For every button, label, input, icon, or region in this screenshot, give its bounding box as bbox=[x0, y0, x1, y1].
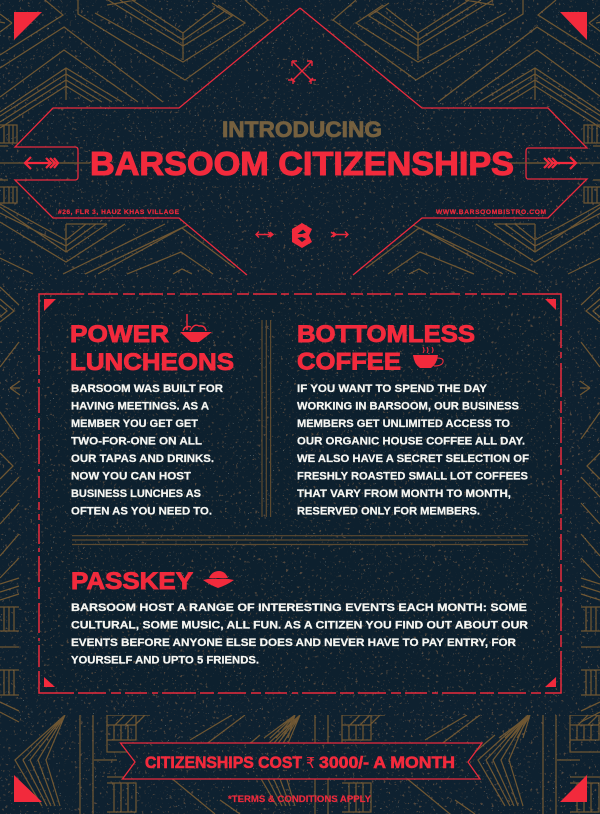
heading: passkey: PASSKEY bbox=[71, 568, 193, 595]
title: BARSOOM CITIZENSHIPS bbox=[90, 146, 514, 183]
heading: power luncheons bbox=[70, 321, 234, 376]
price banner: CITIZENSHIPS COST bbox=[145, 754, 302, 772]
text: passkey: CULTURAL, SOME MUSIC, ALL FUN. AS A CITIZEN YOU FIND OUT ABOUT OUR bbox=[71, 620, 528, 632]
text: bottomless coffee: IF YOU WANT TO SPEND THE DAY bbox=[297, 383, 488, 395]
text: bottomless coffee: WORKING IN BARSOOM, OUR BUSINESS bbox=[297, 400, 519, 412]
header plaque fill bbox=[15, 8, 587, 275]
icon: small right arrow bbox=[331, 232, 348, 238]
price banner bbox=[120, 743, 482, 779]
section: bottomless coffee bbox=[297, 321, 529, 518]
heading: bottomless coffee bbox=[297, 321, 475, 376]
heading: bottomless coffee: COFFEE bbox=[297, 348, 401, 376]
inner corner triangles bbox=[44, 299, 556, 687]
banner fill bbox=[120, 743, 482, 779]
panel: benefits bbox=[39, 294, 561, 693]
heading: bottomless coffee: BOTTOMLESS bbox=[297, 321, 475, 348]
text: bottomless coffee: THAT VARY FROM MONTH TO MONTH, bbox=[297, 488, 511, 500]
heading: power luncheons: LUNCHEONS bbox=[70, 349, 234, 376]
text: passkey: YOURSELF AND UPTO 5 FRIENDS. bbox=[71, 654, 259, 666]
terms note: *TERMS & CONDITIONS APPLY bbox=[228, 794, 371, 804]
column dividers bbox=[72, 320, 528, 544]
icon: coffee cup bbox=[413, 347, 443, 368]
heading: introducing: INTRODUCING bbox=[222, 117, 382, 142]
text: bottomless coffee: RESERVED ONLY FOR MEMBERS. bbox=[297, 506, 480, 518]
text: passkey: EVENTS BEFORE ANYONE ELSE DOES AND NEVER HAVE TO PAY ENTRY, FOR bbox=[71, 637, 516, 649]
text: power luncheons: MEMBER YOU GET GET bbox=[71, 418, 198, 430]
panel dashed border bbox=[39, 294, 561, 693]
icon: logo bbox=[292, 223, 312, 248]
text: power luncheons: HAVING MEETINGS. AS A bbox=[71, 400, 209, 412]
section: power luncheons bbox=[70, 314, 234, 518]
icon: left arrow bbox=[25, 157, 58, 169]
text: power luncheons: NOW YOU CAN HOST bbox=[71, 470, 191, 482]
text: bottomless coffee: MEMBERS GET UNLIMITED ACCESS TO bbox=[297, 418, 510, 430]
text: passkey: BARSOOM HOST A RANGE OF INTERESTING EVENTS EACH MONTH: SOME bbox=[71, 602, 527, 614]
text: passkey bbox=[71, 602, 528, 666]
icon: noodle bowl bbox=[180, 314, 212, 342]
text: power luncheons bbox=[71, 383, 223, 518]
website: WWW.BARSOOMBISTRO.COM bbox=[436, 209, 546, 216]
price banner: 3000/- A MONTH bbox=[319, 754, 455, 772]
text: bottomless coffee bbox=[297, 383, 529, 518]
icon: small left arrow bbox=[256, 232, 273, 238]
text: power luncheons: TWO-FOR-ONE ON ALL bbox=[71, 436, 202, 448]
text: power luncheons: OUR TAPAS AND DRINKS. bbox=[71, 453, 214, 465]
text: power luncheons: BARSOOM WAS BUILT FOR bbox=[71, 383, 223, 395]
panel background bbox=[39, 294, 561, 693]
text: bottomless coffee: OUR ORGANIC HOUSE COFFEE ALL DAY. bbox=[297, 436, 525, 448]
section: passkey bbox=[71, 568, 528, 666]
text: bottomless coffee: WE ALSO HAVE A SECRET SELECTION OF bbox=[297, 453, 529, 465]
icon: ufo bbox=[203, 571, 234, 588]
background pattern: top bbox=[0, 0, 600, 274]
background pattern: sides bbox=[0, 287, 600, 722]
address: #26, FLR 3, HAUZ KHAS VILLAGE bbox=[58, 209, 180, 216]
icon: right arrow bbox=[544, 157, 576, 169]
text: bottomless coffee: FRESHLY ROASTED SMALL LOT COFFEES bbox=[297, 470, 528, 482]
text: power luncheons: OFTEN AS YOU NEED TO. bbox=[71, 506, 212, 518]
background pattern: bottom bbox=[15, 715, 600, 814]
text: power luncheons: BUSINESS LUNCHES AS bbox=[71, 488, 201, 500]
price banner: ₹ bbox=[306, 754, 315, 772]
heading: power luncheons: POWER bbox=[70, 321, 169, 348]
icon: crossed arrows bbox=[288, 61, 316, 84]
header plaque outline bbox=[15, 8, 587, 275]
